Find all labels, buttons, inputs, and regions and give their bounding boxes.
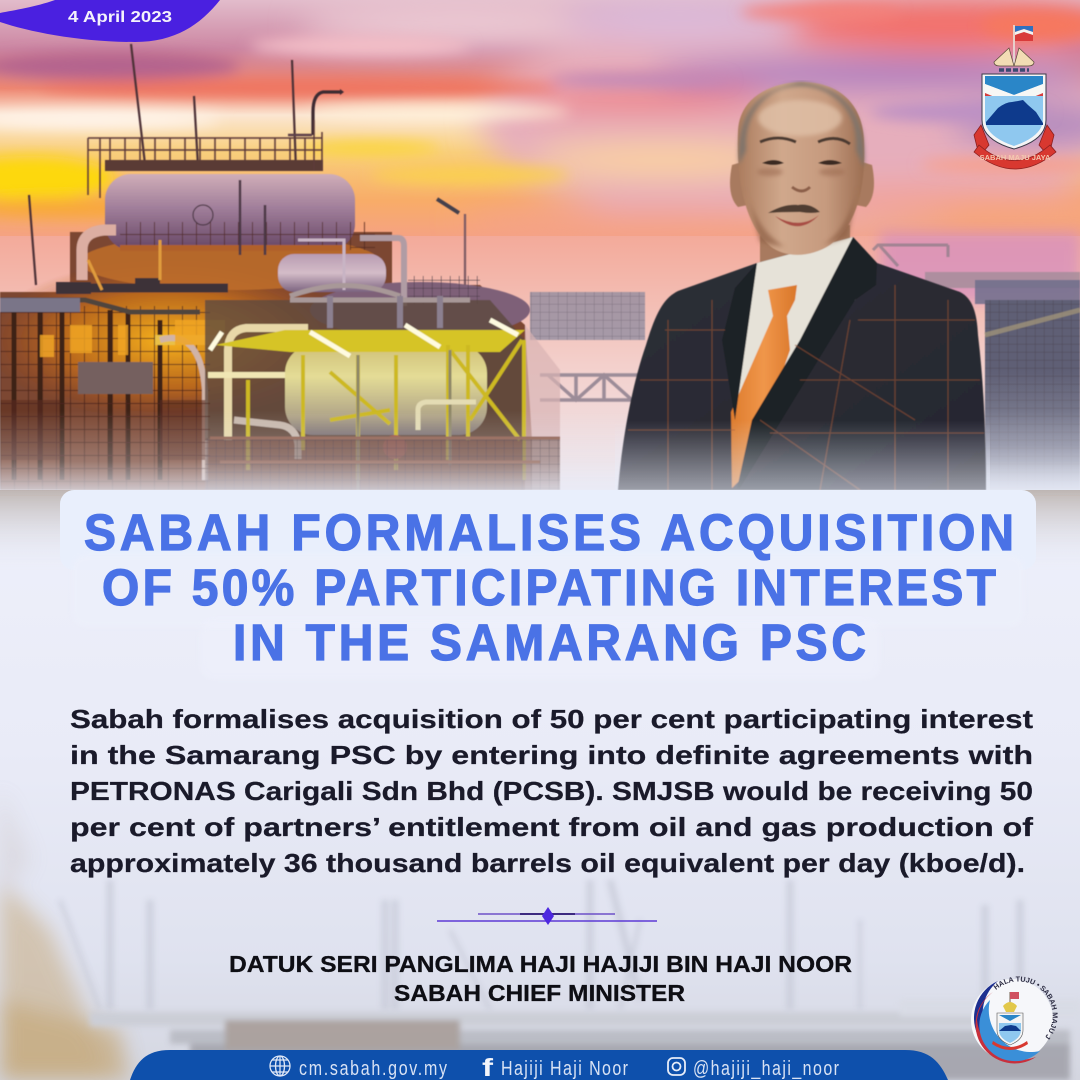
attribution: DATUK SERI PANGLIMA HAJI HAJIJI BIN HAJI NOOR xyxy=(229,951,852,977)
portrait fade at bottom xyxy=(615,420,990,490)
platform: orange yellow lattice, left xyxy=(0,240,228,486)
portrait: tie xyxy=(731,285,797,488)
fade of right pier xyxy=(985,370,1080,495)
platform: white pipe run xyxy=(208,328,330,459)
portrait: head xyxy=(730,82,874,255)
portrait of chief minister xyxy=(618,82,986,490)
portrait: neck xyxy=(760,225,850,285)
left fade under photo xyxy=(0,490,1080,570)
title xyxy=(84,505,1014,671)
sea xyxy=(0,232,1080,496)
circular Hala Tuju logo: HALA TUJU • SABAH MAJU JAYA xyxy=(993,976,1058,1040)
platform: masts and lamps xyxy=(29,44,465,285)
faded pipe yard background xyxy=(0,790,1080,1080)
crest: banner: SABAH MAJU JAYA xyxy=(980,153,1051,162)
portrait: jacket xyxy=(618,237,986,490)
attribution: SABAH CHIEF MINISTER xyxy=(394,980,685,1006)
body text: per cent of partners’ entitlement from oil and gas production of xyxy=(70,812,1033,842)
distant offshore pier, right side xyxy=(530,245,1080,490)
portrait: right lapel xyxy=(737,237,877,488)
body text: approximately 36 thousand barrels oil equivalent per day (kboe/d). xyxy=(70,848,1025,878)
crest: beads xyxy=(999,68,1029,72)
title: IN THE SAMARANG PSC xyxy=(233,615,866,671)
platform: pale yellow vessel xyxy=(285,345,487,435)
platform: second tank xyxy=(278,240,480,304)
crest: arms holding pole xyxy=(994,48,1034,66)
portrait: shirt and collar xyxy=(735,237,872,420)
icon: instagram xyxy=(668,1058,685,1075)
oil and gas platform xyxy=(0,44,560,490)
title: SABAH FORMALISES ACQUISITION xyxy=(84,505,1014,561)
portrait: jacket check pattern xyxy=(628,285,984,490)
platform: yellow steel frame xyxy=(210,320,525,490)
platform: hull and warm glow backdrop xyxy=(0,232,560,490)
crest: banner xyxy=(974,125,1056,169)
body text: in the Samarang PSC by entering into definite agreements with xyxy=(70,740,1033,770)
instagram handle: @hajiji_haji_noor xyxy=(693,1057,839,1080)
platform: lower decks xyxy=(0,400,560,490)
title background boxes xyxy=(60,490,1036,680)
crest: flag xyxy=(1014,25,1033,65)
website: cm.sabah.gov.my xyxy=(299,1057,448,1079)
portrait: face shading xyxy=(739,82,864,247)
stacked pipes xyxy=(90,1000,1080,1080)
platform: insulated vertical pipes xyxy=(82,230,404,306)
Sabah state crest xyxy=(974,25,1056,169)
platform: upper railing xyxy=(88,120,323,198)
footer bar xyxy=(130,1050,948,1080)
divider ornament xyxy=(437,907,657,925)
background: lower pale panel xyxy=(0,480,1080,1080)
fade of photo into panel xyxy=(0,410,1080,495)
platform: large upper tank xyxy=(105,174,375,255)
facebook handle: Hajiji Haji Noor xyxy=(501,1057,628,1079)
platform: deck behind yellow frame xyxy=(205,286,525,440)
date badge: 4 April 2023 xyxy=(68,9,172,26)
faded cranes xyxy=(60,880,1020,1010)
icon: globe xyxy=(270,1056,290,1076)
portrait: left lapel xyxy=(722,263,757,420)
attribution xyxy=(229,951,852,1006)
crest: shield xyxy=(982,74,1046,149)
faded timber pile xyxy=(0,790,130,1080)
body text: Sabah formalises acquisition of 50 per cent participating interest xyxy=(70,704,1033,734)
date badge xyxy=(0,0,220,42)
title: OF 50% PARTICIPATING INTEREST xyxy=(102,560,996,616)
sunset sky xyxy=(0,0,1080,245)
body text: PETRONAS Carigali Sdn Bhd (PCSB). SMJSB would be receiving 50 xyxy=(70,776,1033,806)
body text xyxy=(70,704,1033,878)
